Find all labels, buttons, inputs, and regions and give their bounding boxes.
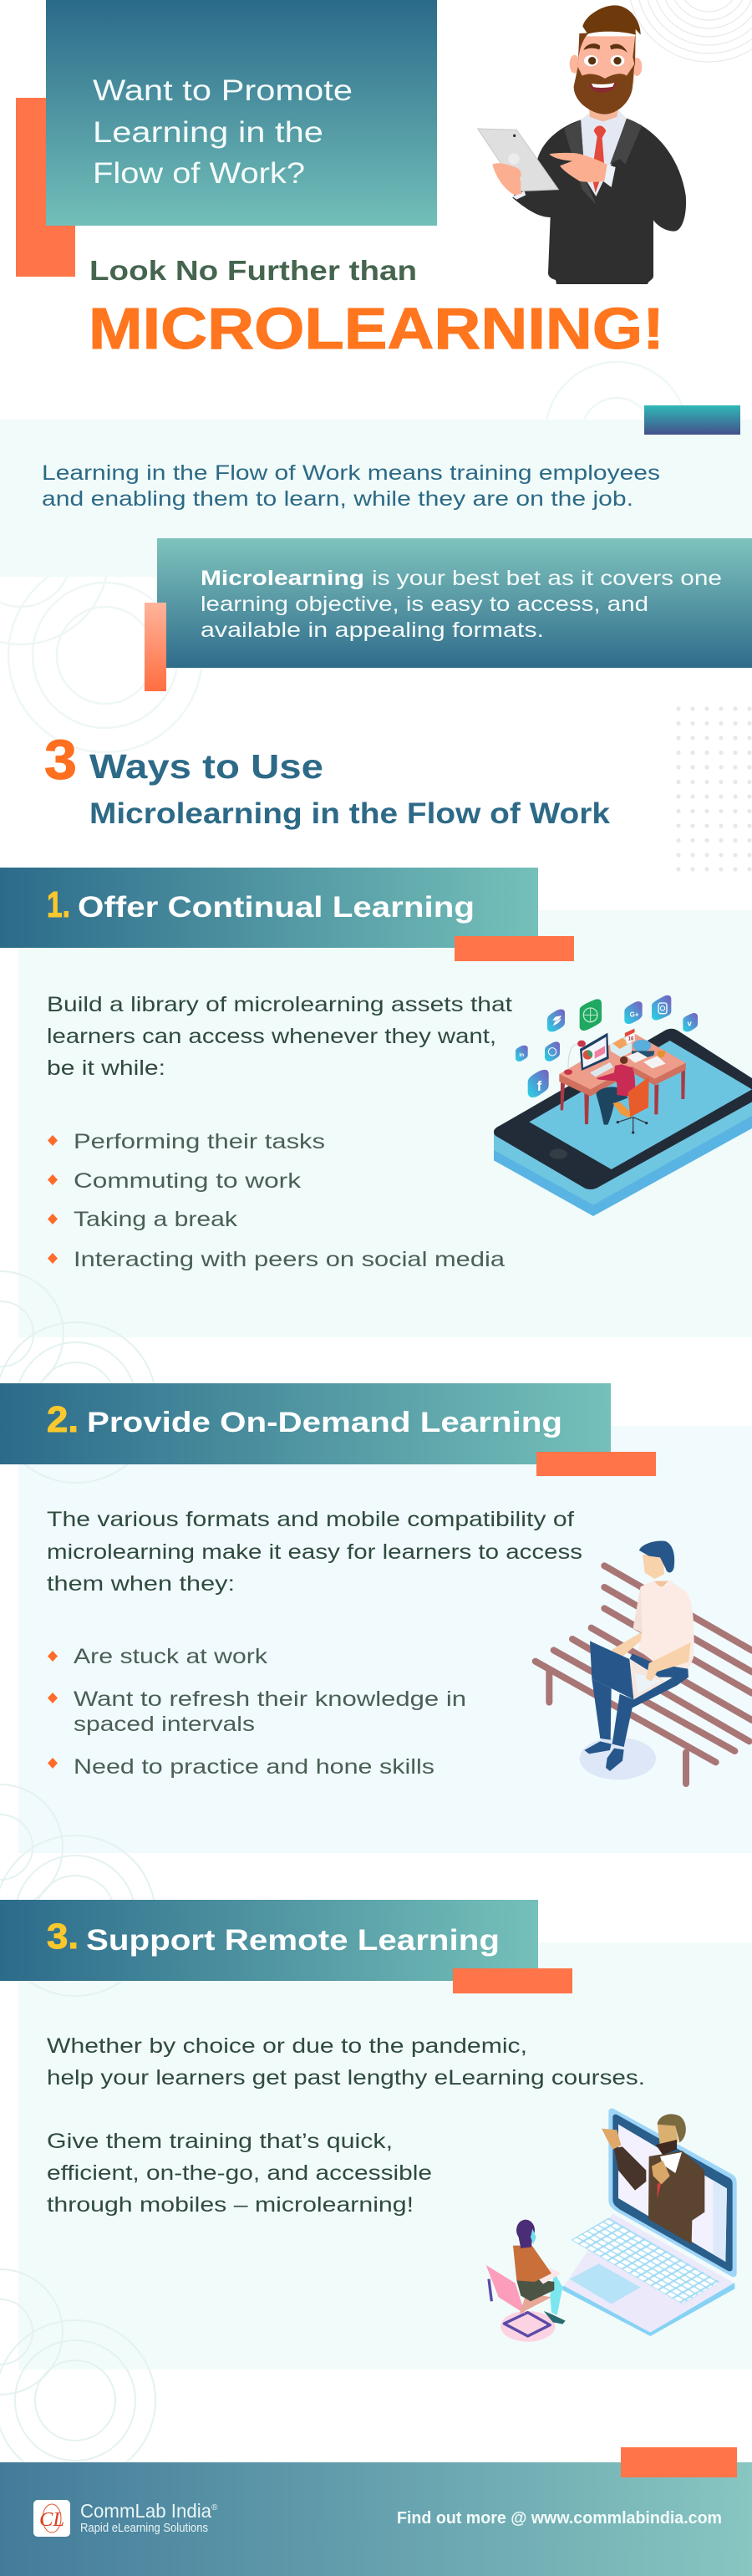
- social icon: vimeo: [683, 1013, 698, 1031]
- section 1 body text: Build a library of microlearning assets that: [47, 993, 512, 1016]
- section 3 body text: help your learners get past lengthy eLearning courses.: [47, 2066, 645, 2090]
- illustration: phone with desk and social icons: 16: [628, 1037, 634, 1042]
- social icon: google plus: G+: [630, 1011, 639, 1019]
- decoration: rings below section 3: [0, 2269, 155, 2481]
- section 2 bullet list: Need to practice and hone skills: [74, 1755, 434, 1779]
- heading: 3 ways: [44, 729, 611, 830]
- section 1 body text: be it while:: [47, 1056, 165, 1080]
- callout text: is your best bet as it covers one: [372, 567, 722, 590]
- section 1 bullet list: [48, 1130, 505, 1271]
- title question text: Flow of Work?: [93, 157, 305, 190]
- section 2 bullet list: Want to refresh their knowledge in: [74, 1688, 466, 1711]
- section 3 header: [0, 1900, 572, 1993]
- panel: section 1 background: [18, 910, 752, 1337]
- illustration: phone with desk and social icons: [494, 995, 752, 1216]
- small gradient tab: [644, 405, 740, 435]
- footer: [0, 2447, 752, 2576]
- brand tagline: Rapid eLearning Solutions: [80, 2521, 208, 2535]
- orange accent block: [16, 98, 75, 277]
- footer link text: Find out more @ www.commlabindia.com: [397, 2509, 722, 2528]
- social icon: google plus: [624, 1001, 643, 1024]
- section 1 bullet list: Taking a break: [74, 1208, 238, 1231]
- social icon: instagram: [652, 995, 671, 1021]
- section 1 body text: learners can access whenever they want,: [47, 1025, 496, 1048]
- social icon: whatsapp: [545, 1041, 560, 1061]
- panel: section 2 background: [18, 1426, 752, 1853]
- section 2 bullet list: Are stuck at work: [74, 1645, 268, 1668]
- social icon: facebook: f: [537, 1078, 542, 1094]
- orange tab: [453, 1968, 572, 1993]
- decoration: rings between sections 2 and 3: [0, 1784, 155, 1996]
- panel: intro definition: [0, 420, 752, 577]
- orange tab: [455, 936, 574, 961]
- callout: microlearning: [157, 538, 752, 668]
- section 3 body text: Whether by choice or due to the pandemic,: [47, 2034, 527, 2058]
- number 2: 2.: [47, 1399, 79, 1440]
- illustration: businessman with tablet: [478, 5, 686, 284]
- social icon: globe: [580, 999, 602, 1031]
- section 2 body text: The various formats and mobile compatibility of: [47, 1508, 574, 1531]
- illustration: laptop video call with trainer and learner: [486, 2109, 737, 2342]
- title question text: Want to Promote: [93, 74, 353, 107]
- section 1 header: [0, 868, 574, 961]
- section 2 body text: them when they:: [47, 1572, 235, 1596]
- section 3 title: Support Remote Learning: [86, 1924, 500, 1957]
- section 2 body text: [47, 1508, 582, 1596]
- section 3 body text: Give them training that’s quick,: [47, 2130, 393, 2153]
- number 3: 3.: [47, 1917, 79, 1957]
- decoration: rings left of intro callout: [0, 469, 202, 752]
- section 2 bullet list: [48, 1645, 466, 1779]
- logo: [33, 2500, 70, 2537]
- callout text: Microlearning: [201, 567, 364, 590]
- decoration: rings between sections 1 and 2: [0, 1271, 156, 1483]
- orange gradient bar: [145, 603, 166, 691]
- panel: section 3 background: [18, 1942, 752, 2370]
- callout text: [201, 567, 722, 642]
- logo: CL: [39, 2509, 64, 2531]
- social icon: facebook: [528, 1070, 549, 1097]
- social icon: vimeo: v: [688, 1019, 693, 1027]
- section 1 bullet list: Commuting to work: [74, 1169, 302, 1193]
- social icon: linkedin: in: [519, 1052, 524, 1058]
- callout text: available in appealing formats.: [201, 619, 544, 642]
- orange tab: [621, 2447, 737, 2477]
- brand name: CommLab India: [80, 2500, 211, 2522]
- section 1 title: Offer Continual Learning: [78, 891, 475, 924]
- section 2 bullet list: spaced intervals: [74, 1713, 255, 1736]
- section 3 body text: through mobiles – microlearning!: [47, 2193, 414, 2217]
- section 1 body text: [47, 993, 512, 1080]
- section 1 bullet list: Interacting with peers on social media: [74, 1248, 505, 1271]
- decoration: rings above intro panel: [546, 362, 688, 504]
- social icon: twitter: [547, 1010, 565, 1031]
- section 2 title: Provide On-Demand Learning: [87, 1407, 562, 1438]
- title question text: [93, 74, 353, 190]
- decoration: top right concentric rings: [628, 0, 752, 62]
- section 3 body text: [47, 2034, 645, 2217]
- section 2 body text: microlearning make it easy for learners to access: [47, 1540, 582, 1564]
- intro text: Learning in the Flow of Work means training employees: [42, 461, 660, 485]
- number 1: 1.: [47, 884, 70, 925]
- registered mark: ®: [211, 2503, 218, 2512]
- numeral 3: 3: [44, 729, 77, 792]
- title question text: Learning in the: [93, 116, 323, 149]
- decoration: dot grid: [676, 706, 752, 872]
- section 3 body text: efficient, on-the-go, and accessible: [47, 2161, 432, 2185]
- intro text: and enabling them to learn, while they are on the job.: [42, 487, 633, 511]
- orange tab: [536, 1452, 656, 1476]
- heading line 2: Microlearning in the Flow of Work: [89, 797, 611, 830]
- social icon: linkedin: [516, 1046, 528, 1061]
- illustration: man on bench with laptop: [536, 1541, 752, 1784]
- subtitle: Look No Further than: [89, 255, 417, 286]
- title box: [46, 0, 437, 226]
- section 2 header: [0, 1383, 656, 1476]
- main title: MICROLEARNING!: [89, 296, 664, 361]
- intro text: [42, 461, 660, 511]
- section 1 bullet list: Performing their tasks: [74, 1130, 325, 1153]
- callout text: learning objective, is easy to access, and: [201, 593, 648, 616]
- heading line 1: Ways to Use: [89, 747, 323, 786]
